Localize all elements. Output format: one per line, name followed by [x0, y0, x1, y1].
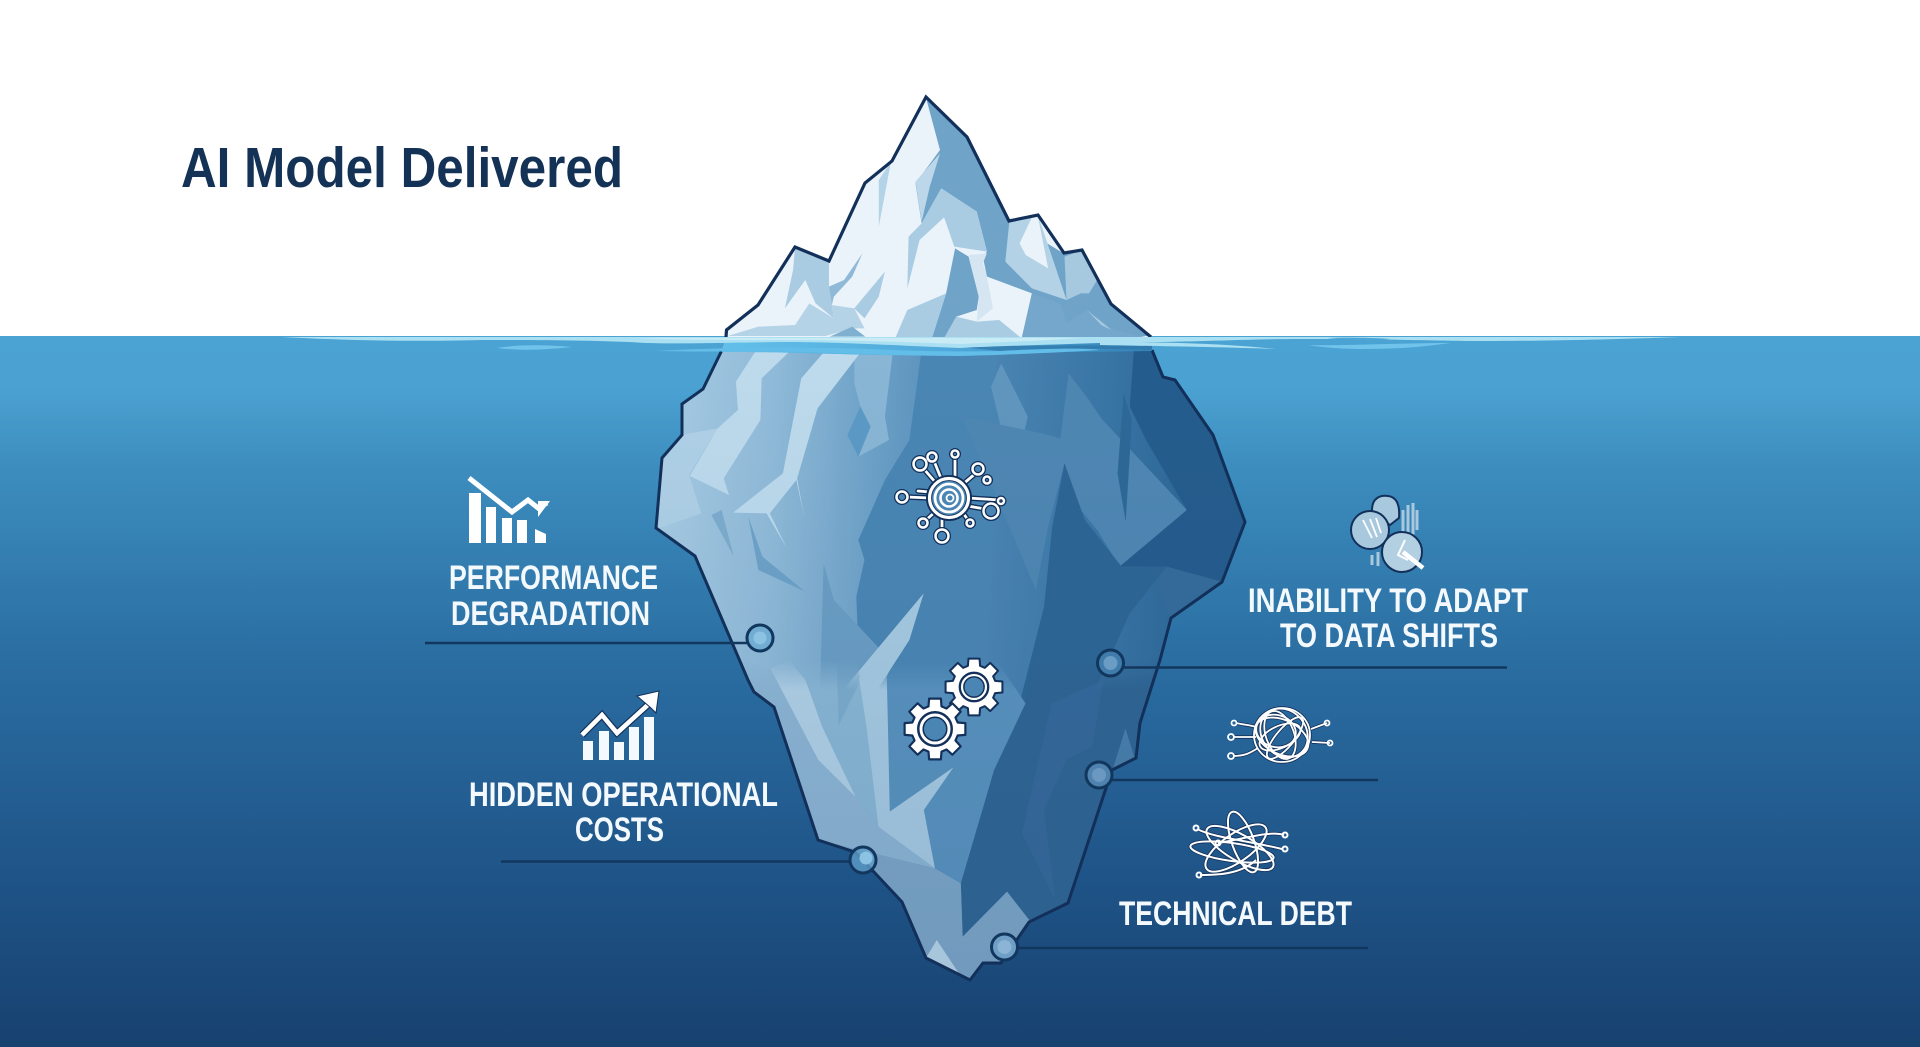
label: hidden operational costs: HIDDEN OPERATIONAL	[469, 776, 778, 814]
icon: gears	[905, 659, 1002, 759]
leader line and dot: technical debt	[992, 934, 1368, 960]
leader line and dot: tangled wires	[1086, 762, 1378, 788]
label: hidden operational costs: COSTS	[575, 811, 664, 849]
label: performance degradation: PERFORMANCE	[449, 559, 658, 597]
label: inability to adapt to data shifts: INABILITY TO ADAPT	[1248, 582, 1528, 620]
icon: tangled wires	[1228, 699, 1332, 767]
title: AI Model Delivered	[181, 136, 623, 200]
icon: falling chart	[469, 478, 550, 543]
icon: neural network hub	[896, 450, 1004, 542]
label: inability to adapt to data shifts	[1248, 582, 1528, 655]
label: inability to adapt to data shifts: TO DATA SHIFTS	[1280, 617, 1498, 655]
iceberg below water	[650, 336, 1250, 986]
iceberg above water	[720, 90, 1160, 340]
leader line and dot: hidden operational costs	[501, 847, 876, 873]
gear upper right	[946, 659, 1002, 715]
label: performance degradation: DEGRADATION	[451, 595, 650, 633]
icon: rising chart	[582, 691, 659, 760]
gear lower left	[905, 699, 965, 759]
icon: tangled debt knot	[1189, 808, 1288, 880]
label: technical debt: TECHNICAL DEBT	[1119, 895, 1352, 933]
label: hidden operational costs	[469, 776, 778, 849]
sky background	[0, 0, 1920, 337]
water surface highlights	[282, 337, 1680, 356]
icon: data shift dials	[1351, 496, 1423, 572]
ocean background	[0, 336, 1920, 1047]
leader line and dot: performance degradation	[425, 625, 773, 651]
leader line and dot: inability to adapt	[1098, 650, 1507, 676]
label: performance degradation	[449, 559, 658, 633]
